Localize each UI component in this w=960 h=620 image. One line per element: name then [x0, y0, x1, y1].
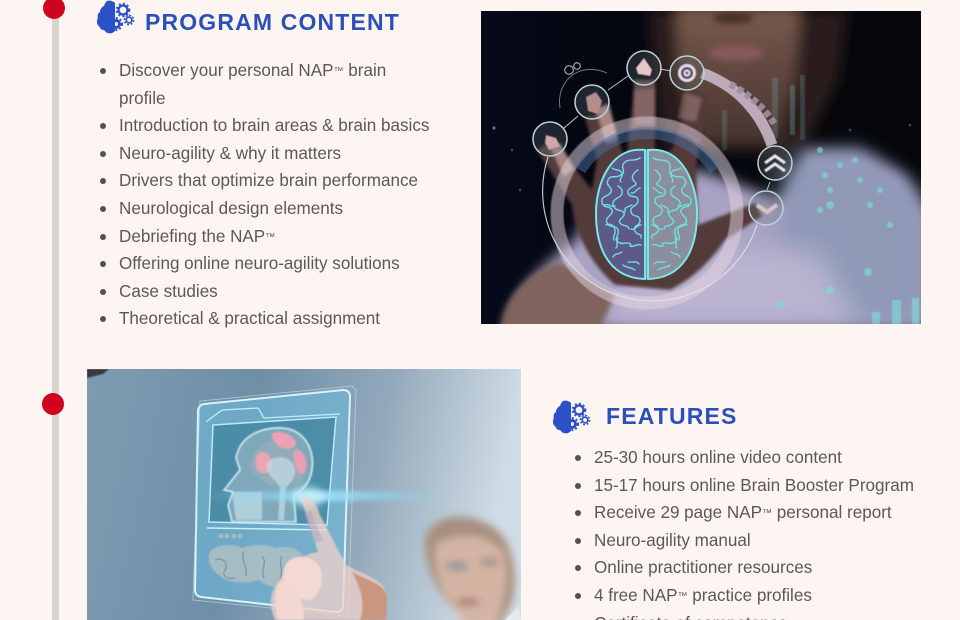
panel: program content	[97, 0, 429, 328]
panel: features	[553, 400, 914, 620]
arm	[500, 262, 615, 330]
thin outer ring arc	[543, 157, 757, 301]
bullet list: program content: Introduction to brain areas & brain basics	[119, 116, 429, 135]
shirt	[505, 150, 930, 330]
bullet list: features: Receive 29 page NAP™ personal report	[594, 503, 892, 522]
bullet list: features: 15-17 hours online Brain Booster Program	[594, 476, 914, 495]
bullet list: features: Neuro-agility manual	[594, 531, 751, 550]
hair and face	[648, 5, 848, 151]
small orbit circles	[559, 63, 607, 108]
heading: features: FEATURES	[606, 403, 737, 429]
head scan	[224, 428, 313, 522]
top left dark corner	[87, 369, 109, 378]
bullet list: program content	[100, 61, 429, 328]
bullet list: features	[575, 448, 914, 620]
bullet list: features: Online practitioner resources	[594, 558, 812, 577]
bullet list: program content: Neuro-agility & why it matters	[119, 144, 341, 163]
bullet list: program content: profile	[119, 89, 166, 108]
timeline dot: program content	[43, 0, 65, 19]
timeline dot: features	[42, 393, 64, 415]
photo background	[481, 11, 921, 324]
holographic brain	[596, 150, 697, 279]
icon: brain with gears	[97, 0, 134, 34]
finger icon circles	[533, 51, 792, 225]
photo: hand touching holographic brain	[481, 11, 921, 324]
thick translucent ring	[557, 123, 737, 303]
bullet list: program content: Neurological design elements	[119, 199, 343, 218]
heading: program content: PROGRAM CONTENT	[145, 9, 400, 35]
photo background	[87, 369, 521, 620]
bullet list: features: 25-30 hours online video content	[594, 448, 842, 467]
shirt collar	[505, 606, 521, 620]
bullet list: program content: Theoretical & practical assignment	[119, 309, 380, 328]
circle glyphs	[545, 58, 785, 212]
bullet list: program content: Case studies	[119, 282, 218, 301]
bullet list: program content: Debriefing the NAP™	[119, 227, 275, 246]
holographic tablet	[193, 386, 356, 616]
blurred man	[425, 517, 515, 620]
lips and nose shadow	[709, 45, 763, 61]
bullet list: program content: Offering online neuro-agility solutions	[119, 254, 400, 273]
hand and fingers	[537, 88, 762, 290]
bullet list: program content: Discover your personal NAP™ brain	[119, 61, 386, 80]
bullet list: features: 4 free NAP™ practice profiles	[594, 586, 812, 605]
pointing hand	[271, 497, 387, 620]
photo: touching a holographic head scan	[87, 369, 521, 620]
fingertips	[550, 80, 702, 177]
teal data sparkles	[492, 75, 919, 324]
icon: brain with gears	[553, 400, 590, 434]
light flare	[200, 491, 450, 501]
connector lines	[564, 69, 770, 190]
top right arc	[702, 73, 772, 145]
small scan tiles	[209, 534, 303, 588]
timeline rail	[52, 0, 59, 620]
bullet list: program content: Drivers that optimize brain performance	[119, 171, 418, 190]
